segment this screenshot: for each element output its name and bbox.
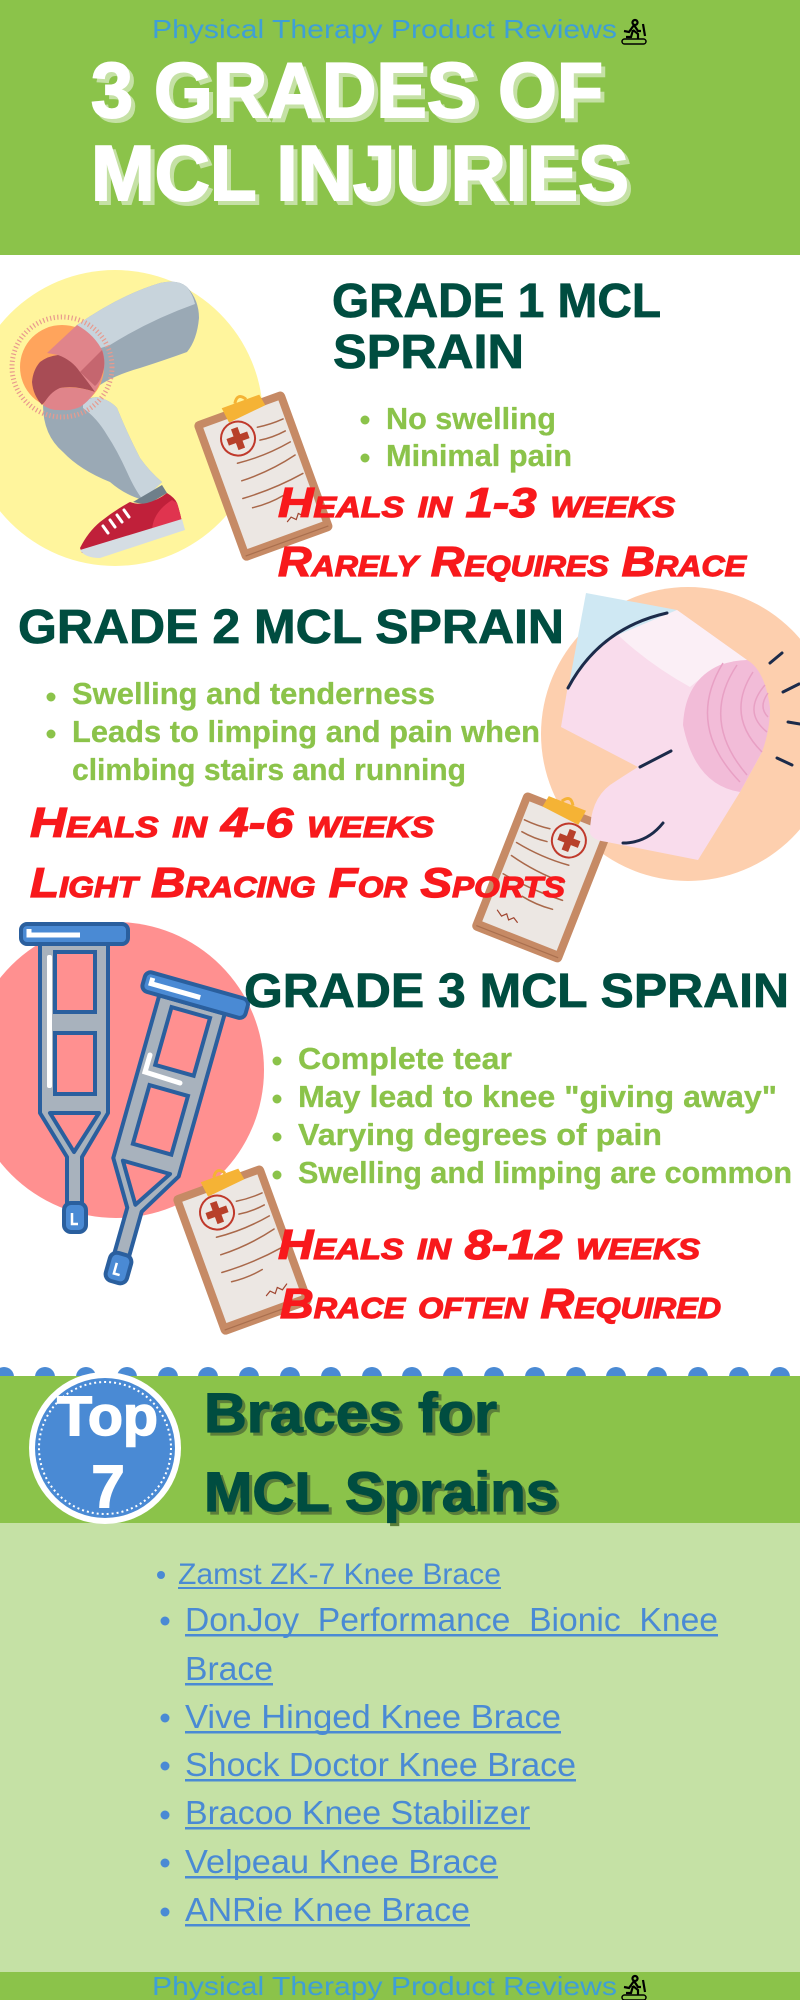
- heading: grade 1: SPRAIN: [333, 326, 524, 379]
- heading: grade 3: GRADE 3 MCL SPRAIN: [244, 965, 789, 1018]
- title: 3 GRADES OF: [95, 50, 607, 138]
- healing note: grade 2: Heals in 4-6 weeks: [30, 799, 435, 846]
- site credit top: Physical Therapy Product Reviews: [152, 14, 617, 44]
- heading: grade 1: [332, 275, 661, 379]
- heading: braces for MCL sprains: Braces for: [207, 1384, 500, 1447]
- icon: crutches: [21, 924, 249, 1296]
- icon: treadmill bottom: [622, 1976, 646, 2000]
- healing note: grade 1: Rarely Requires Brace: [278, 538, 748, 585]
- badge: top 7: [29, 1372, 181, 1524]
- symptoms list: grade 3: Varying degrees of pain: [298, 1117, 662, 1152]
- panel: grade 2: [18, 587, 800, 964]
- healing note: grade 3: Brace often Required: [280, 1280, 721, 1327]
- badge: top 7: 7: [91, 1453, 125, 1520]
- symptoms list: grade 2: climbing stairs and running: [72, 752, 466, 787]
- peach circle backdrop: [541, 587, 800, 881]
- symptoms list: grade 3: [272, 1041, 792, 1190]
- symptoms list: grade 1: No swelling: [386, 401, 556, 436]
- item: Shock Doctor: Shock Doctor Knee Brace: [185, 1746, 576, 1783]
- healing note: grade 3: Heals in 8-12 weeks: [278, 1221, 701, 1268]
- scalloped blue dots: [0, 1367, 790, 1387]
- symptoms list: grade 2: Swelling and tenderness: [72, 676, 435, 711]
- symptoms list: grade 1: Minimal pain: [386, 438, 572, 473]
- healing note: grade 2: [30, 799, 566, 906]
- symptoms list: grade 3: May lead to knee "giving away": [298, 1079, 777, 1114]
- item: Vive: Vive Hinged Knee Brace: [185, 1698, 561, 1735]
- panel: grade 3: [0, 922, 792, 1336]
- title: MCL INJURIES: [95, 133, 633, 221]
- item: Velpeau: Velpeau Knee Brace: [185, 1843, 498, 1880]
- icon: wrapped knee bandage: [561, 593, 800, 860]
- symptoms list: grade 2: Leads to limping and pain when: [72, 714, 540, 749]
- yellow circle backdrop: [0, 270, 263, 566]
- symptoms list: grade 2: [46, 676, 540, 787]
- item: ANRie: ANRie Knee Brace: [185, 1891, 470, 1928]
- list of braces: [157, 1558, 718, 1928]
- title: 3 GRADES OF: [91, 46, 603, 134]
- item: Bracoo: Bracoo Knee Stabilizer: [185, 1794, 530, 1831]
- heading: grade 1: GRADE 1 MCL: [332, 275, 661, 328]
- header band: [0, 0, 800, 255]
- symptoms list: grade 3: Complete tear: [298, 1041, 512, 1076]
- item: DonJoy: [160, 1601, 718, 1687]
- pink circle backdrop: [0, 922, 264, 1218]
- heading: braces for MCL sprains: MCL Sprains: [204, 1460, 558, 1523]
- badge: top 7: Top: [57, 1384, 158, 1447]
- heading: braces for MCL sprains: [204, 1381, 561, 1526]
- icon: clipboard: [471, 783, 618, 964]
- healing note: grade 1: Heals in 1-3 weeks: [278, 479, 676, 526]
- icon: treadmill top: [622, 20, 646, 44]
- symptoms list: grade 3: Swelling and limping are common: [298, 1155, 792, 1190]
- braces list panel background: [0, 1523, 800, 1972]
- item: DonJoy: Brace: [185, 1650, 273, 1687]
- footer band: [0, 1972, 800, 2000]
- heading: braces for MCL sprains: MCL Sprains: [207, 1463, 561, 1526]
- braces header band: [0, 1376, 800, 1523]
- healing note: grade 3: [278, 1221, 721, 1327]
- icon: clipboard: [190, 382, 334, 562]
- item: DonJoy: DonJoy Performance Bionic Knee: [185, 1601, 718, 1638]
- healing note: grade 1: [278, 479, 748, 585]
- icon: clipboard: [169, 1156, 313, 1336]
- symptoms list: grade 1: [360, 401, 572, 473]
- icon: injured leg: [12, 282, 199, 558]
- title: MCL INJURIES: [91, 129, 629, 217]
- healing note: grade 2: Light Bracing For Sports: [30, 859, 566, 906]
- item: Zamst: Zamst ZK-7 Knee Brace: [178, 1558, 501, 1591]
- panel: grade 1: [0, 270, 748, 585]
- heading: braces for MCL sprains: Braces for: [204, 1381, 497, 1444]
- title: [91, 46, 633, 221]
- heading: grade 2: GRADE 2 MCL SPRAIN: [18, 601, 564, 654]
